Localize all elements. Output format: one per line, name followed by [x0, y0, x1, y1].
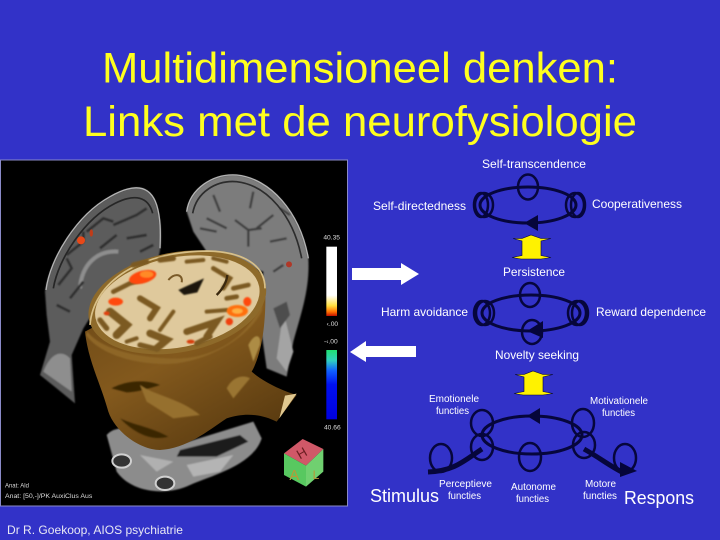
yellow double arrow lower: [514, 371, 553, 395]
orientation cube: [284, 439, 323, 487]
bottom axial MRI slice: [107, 422, 262, 491]
right coronal MRI slice: [187, 175, 309, 377]
label: Emotionele functies: functies: [436, 406, 469, 417]
label: Stimulus: Stimulus: [370, 486, 439, 506]
label: Reward dependence: Reward dependence: [596, 305, 706, 319]
colour scale bars: [323, 235, 341, 432]
orientation cube: L: [313, 468, 320, 482]
label: Novelty seeking: Novelty seeking: [495, 348, 579, 362]
label: Emotionele functies: [429, 394, 479, 417]
colour scale bars: ‹.00: [327, 321, 338, 328]
label: Motore functies: functies: [583, 491, 617, 502]
scan caption: [5, 484, 92, 500]
title: Links met de neurofysiologie: [83, 98, 637, 146]
label: Perceptieve functies: functies: [448, 491, 481, 502]
label: Self-transcendence: Self-transcendence: [482, 157, 586, 171]
label: Persistence: Persistence: [503, 265, 565, 279]
arrow: left white: [350, 341, 416, 362]
orientation cube: A: [289, 468, 299, 484]
label: Motivationele functies: functies: [602, 408, 635, 419]
label: Motivationele functies: Motivationele: [590, 396, 648, 407]
3D head rendering: [85, 282, 297, 450]
credit line: Dr R. Goekoop, AIOS psychiatrie: [7, 523, 183, 537]
loop diagram: character dimensions: [474, 174, 585, 231]
label: Emotionele functies: Emotionele: [429, 394, 479, 405]
title: [83, 44, 637, 146]
orientation cube: H: [294, 444, 310, 462]
left sagittal MRI slice: [40, 188, 161, 403]
label: Self-directedness: Self-directedness: [373, 199, 466, 213]
colour scale bars: 40.35: [323, 235, 340, 242]
colour scale bars: -‹.00: [324, 338, 338, 345]
red activation areas: [104, 267, 251, 344]
label: Harm avoidance: Harm avoidance: [381, 305, 468, 319]
title: Multidimensioneel denken:: [102, 44, 618, 92]
exposed brain cross-section: [79, 236, 275, 369]
label: Motore functies: Motore: [585, 479, 616, 490]
scan caption: Anat: [50,-]/PK AuxiClus Aus: [5, 494, 92, 500]
scan caption: Anat: Ald: [5, 484, 29, 490]
colour scale bars: 40.66: [324, 425, 341, 432]
label: Autonome functies: Autonome: [511, 482, 556, 493]
arrow: right white: [352, 263, 419, 285]
label: Perceptieve functies: [439, 479, 492, 502]
label: Motivationele functies: [590, 396, 648, 419]
brain scan image panel: [0, 160, 348, 506]
yellow double arrow upper: [512, 235, 551, 259]
label: Respons: Respons: [624, 488, 694, 508]
label: Perceptieve functies: Perceptieve: [439, 479, 492, 490]
label: Autonome functies: [511, 482, 556, 505]
loop diagram: temperament dimensions: [474, 283, 588, 344]
label: Autonome functies: functies: [516, 494, 549, 505]
label: Cooperativeness: Cooperativeness: [592, 197, 682, 211]
loop diagram: functions: [428, 408, 637, 477]
label: Motore functies: [583, 479, 617, 502]
